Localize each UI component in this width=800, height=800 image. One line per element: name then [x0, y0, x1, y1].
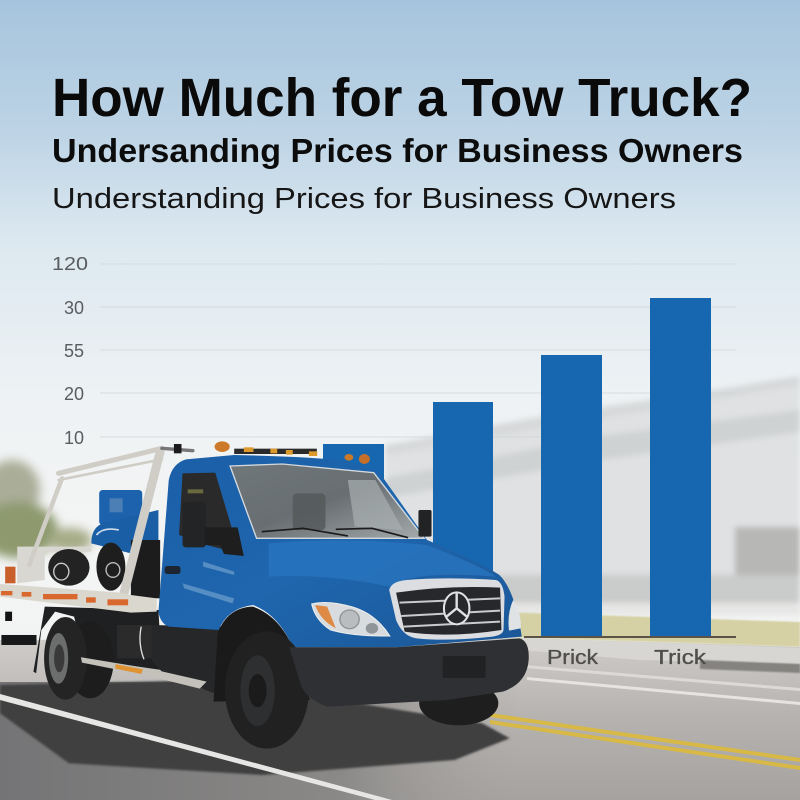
star emblem — [444, 592, 469, 624]
y axis labels: 120 — [52, 254, 88, 274]
far headlight — [509, 600, 521, 631]
y axis labels — [52, 254, 88, 448]
background: blurred trees — [0, 460, 92, 558]
wipers — [262, 528, 408, 538]
y axis labels: 10 — [64, 428, 84, 448]
loaded blue vehicle on flatbed — [17, 490, 160, 598]
y axis labels: 55 — [64, 341, 84, 361]
title: How Much for a Tow Truck? — [52, 68, 752, 128]
door mirror — [183, 502, 244, 556]
chassis and rear fender — [1, 607, 162, 673]
background: grass strip — [500, 612, 800, 647]
tow truck — [0, 441, 529, 749]
bars — [323, 298, 711, 637]
category labels: Trick — [654, 647, 707, 669]
y axis labels: 30 — [64, 298, 84, 318]
road: white edge line and truck shadow — [0, 680, 510, 800]
headlight — [312, 602, 390, 636]
flatbed deck — [0, 567, 157, 621]
side window — [179, 473, 239, 553]
license plate — [443, 656, 486, 678]
cab body — [158, 455, 522, 647]
grille — [389, 578, 505, 640]
side step — [81, 657, 207, 689]
category labels — [547, 647, 707, 669]
bumper — [289, 638, 529, 707]
background: road — [0, 638, 800, 800]
far mirror — [418, 510, 432, 537]
subtitle bold: Undersanding Prices for Business Owners — [52, 132, 743, 169]
subtitle regular: Understanding Prices for Business Owners — [52, 183, 676, 215]
background: blurred building — [385, 376, 800, 615]
front wheel — [225, 631, 309, 749]
gantry frame — [29, 448, 193, 593]
bar chart — [52, 254, 736, 669]
category labels: Prick — [547, 647, 599, 669]
door handle — [165, 566, 180, 574]
fuel tank — [117, 625, 155, 659]
far front wheel — [419, 681, 498, 725]
windshield — [230, 464, 424, 538]
roof light bar — [215, 441, 370, 464]
door highlights — [183, 562, 234, 603]
axis baseline — [524, 636, 736, 638]
rear wheel — [44, 617, 114, 700]
hood highlight — [269, 540, 496, 587]
cab lower dark panel — [152, 625, 227, 693]
y axis labels: 20 — [64, 384, 84, 404]
wheel arch — [214, 607, 310, 702]
